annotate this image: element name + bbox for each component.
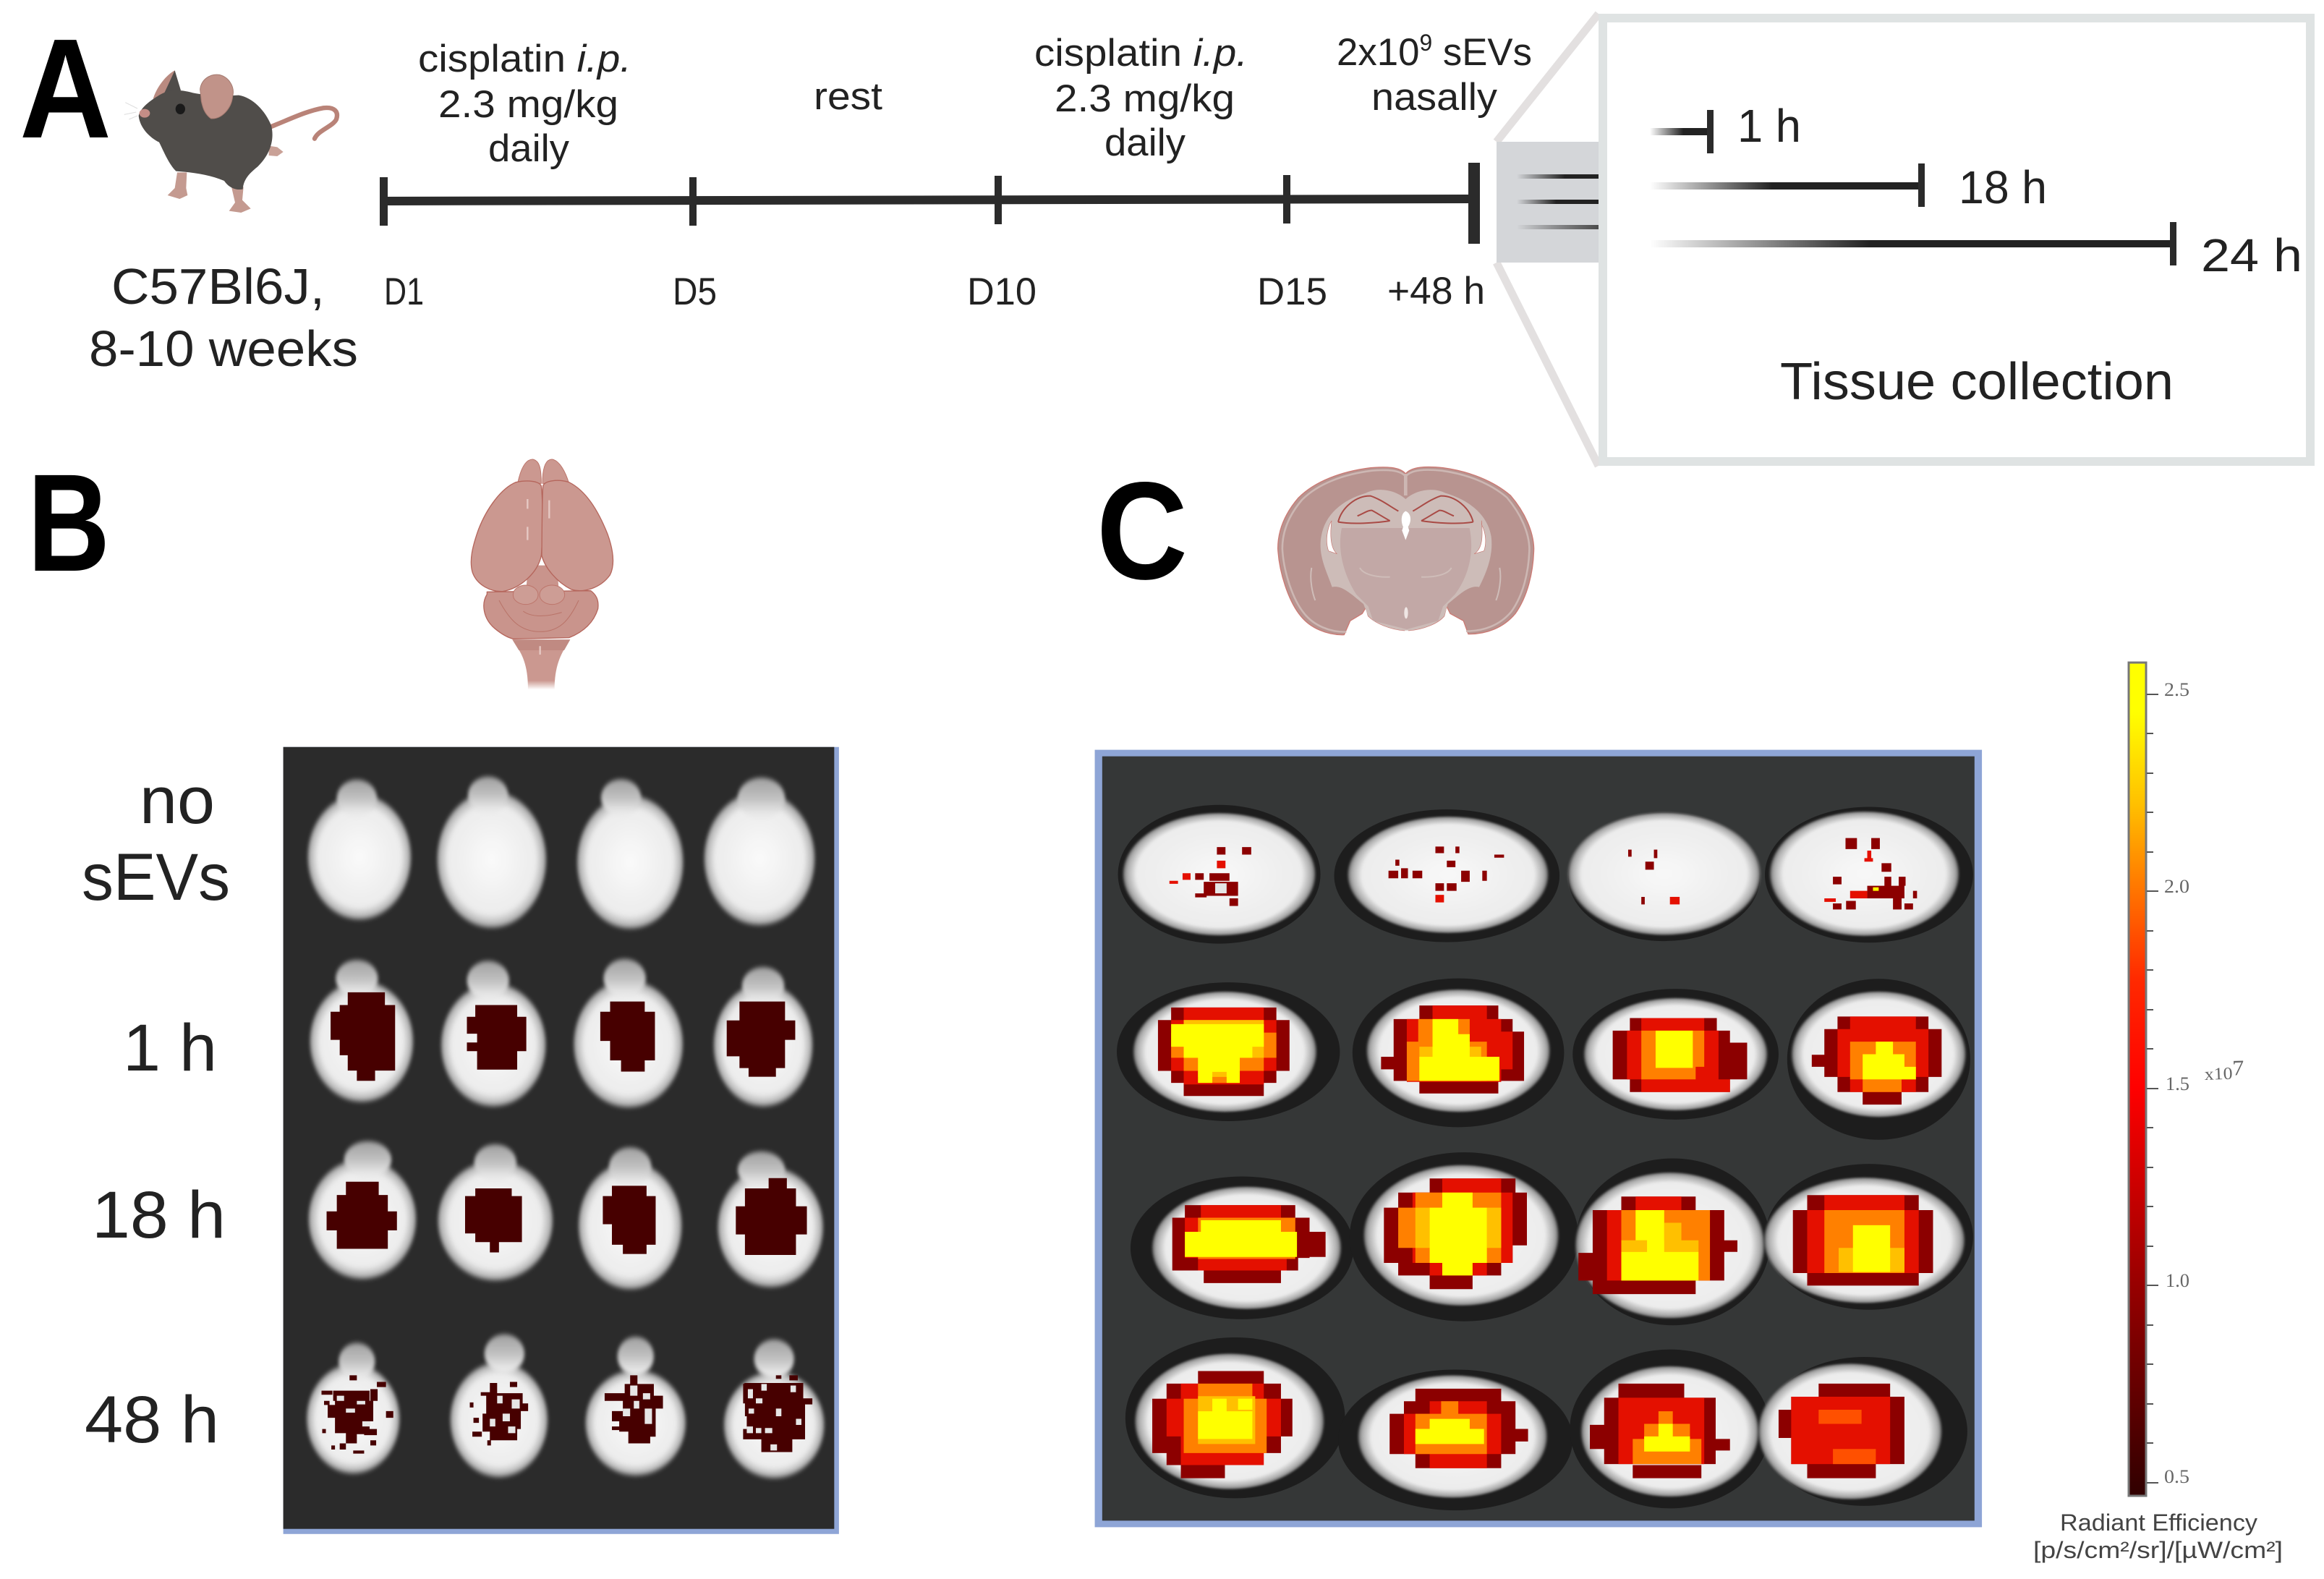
scale title: Radiant Efficiency xyxy=(2060,1510,2257,1536)
panel B row labels: sEVs xyxy=(82,840,230,914)
panel label A: A xyxy=(20,9,111,168)
row: 18 h xyxy=(1131,1152,1973,1325)
timeline annotation: sEV dose: 9 xyxy=(1419,30,1432,56)
panel label C: C xyxy=(1097,453,1188,608)
row: 18 h xyxy=(308,1141,823,1289)
row: 48 h xyxy=(1125,1337,1967,1510)
row: 48 h xyxy=(307,1335,825,1478)
24 h bar xyxy=(1650,222,2302,281)
icon: dorsal brain xyxy=(471,459,613,689)
18 h bar xyxy=(1650,161,2047,213)
mouse strain label: 8-10 weeks xyxy=(89,320,358,377)
row: no sEVs xyxy=(307,777,815,929)
panel B row labels: 48 h xyxy=(85,1383,219,1457)
treatment timeline: D15 xyxy=(1257,271,1327,313)
timeline annotation: second cisplatin: 2.3 mg/kg xyxy=(1055,77,1235,120)
panel label B: B xyxy=(27,445,110,600)
treatment timeline: D5 xyxy=(673,271,717,313)
icon: coronal brain section xyxy=(1278,467,1534,635)
scale tick labels: 1.0 xyxy=(2166,1270,2189,1291)
timeline annotation: first cisplatin: 2.3 mg/kg xyxy=(438,83,618,126)
zoom callout connector xyxy=(1497,14,1604,466)
18 h bar: 18 h xyxy=(1959,161,2047,213)
panel B row labels: no xyxy=(140,764,215,838)
row: 1 h xyxy=(1117,979,1970,1140)
treatment timeline: +48 h xyxy=(1387,270,1485,312)
row: 1 h xyxy=(310,959,813,1107)
panel B row labels: 1 h xyxy=(123,1011,217,1085)
panel: tissue collection inset xyxy=(1603,18,2310,461)
timeline annotation: rest: rest xyxy=(814,75,882,118)
panel B: dorsal fluorescence images xyxy=(284,747,839,1534)
icon: black mouse xyxy=(124,70,337,213)
timeline annotation: first cisplatin: cisplatin i.p. xyxy=(418,38,631,80)
timeline annotation: second cisplatin xyxy=(1034,32,1248,164)
treatment timeline xyxy=(380,163,1485,313)
scale title xyxy=(2033,1510,2283,1563)
panel B row labels xyxy=(82,764,230,1457)
timeline annotation: first cisplatin xyxy=(418,38,631,170)
scale title: [p/s/cm²/sr]/[µW/cm²] xyxy=(2033,1537,2283,1563)
timeline annotation: sEV dose: 2x10 xyxy=(1337,31,1420,74)
mouse strain label: C57Bl6J, xyxy=(111,258,325,315)
scale tick labels: 2.0 xyxy=(2164,876,2189,897)
timeline annotation: second cisplatin: cisplatin i.p. xyxy=(1034,32,1248,75)
row: no sEVs xyxy=(1118,805,1973,944)
treatment timeline: D1 xyxy=(384,271,424,313)
scale tick labels: 2.5 xyxy=(2164,679,2189,700)
1 h bar xyxy=(1650,100,1801,153)
timeline annotation: sEV dose: nasally xyxy=(1371,76,1498,119)
inset caption: Tissue collection xyxy=(1780,353,2174,411)
scale tick labels: 0.5 xyxy=(2164,1466,2189,1487)
scale tick labels: 1.5 xyxy=(2166,1073,2189,1094)
color scale bar xyxy=(2033,663,2283,1563)
panel C: coronal fluorescence images xyxy=(1099,753,1978,1524)
mouse strain label xyxy=(89,258,358,377)
24 h bar: 24 h xyxy=(2201,229,2302,281)
timeline annotation: second cisplatin: daily xyxy=(1104,122,1186,164)
scale tick labels: 7 xyxy=(2232,1056,2244,1081)
timeline annotation: sEV dose xyxy=(1337,30,1532,119)
scale tick labels xyxy=(2164,679,2244,1487)
timeline annotation: sEV dose: sEVs xyxy=(1432,31,1532,74)
1 h bar: 1 h xyxy=(1737,100,1801,152)
panel B row labels: 18 h xyxy=(92,1178,226,1252)
scale tick labels: x10 xyxy=(2204,1065,2231,1084)
treatment timeline: D10 xyxy=(967,271,1037,313)
timeline annotation: first cisplatin: daily xyxy=(488,127,569,170)
